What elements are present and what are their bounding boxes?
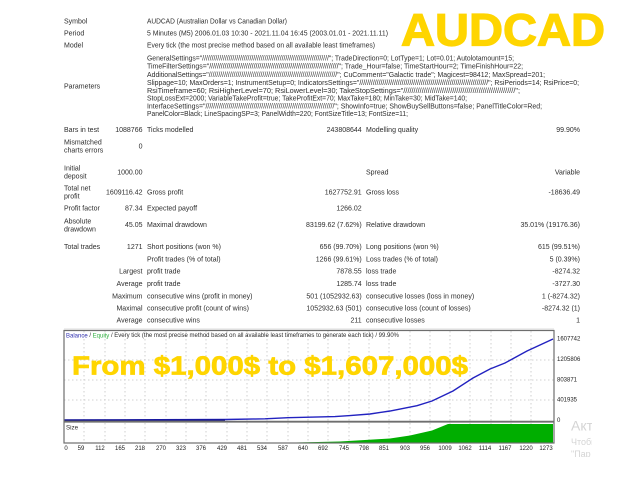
parameters block: PanelColor=Black; LineSpacingSP=3; PanelWidth=220; FontSizeTitle=13; FontSize=11; [147, 111, 408, 118]
profit summary rows: Total net [64, 186, 91, 192]
test quality rows: Mismatched [64, 140, 102, 146]
profit summary rows: -18636.49 [548, 190, 580, 196]
parameters block: TimeFilterSettings="///////////////////////////////////////////////////////////////////"; Trade_Hour=false; TimeStartHour=2; TimeFinishHour=22; [147, 64, 523, 70]
x axis labels: 59 [78, 446, 85, 452]
x axis labels: 745 [339, 446, 350, 452]
x axis labels: 112 [95, 446, 105, 452]
trade statistics rows: Short positions (won %) [147, 244, 221, 251]
trade statistics rows: -8274.32 [552, 268, 580, 276]
watermark text: "Пар [571, 449, 591, 459]
x axis labels: 376 [196, 446, 207, 452]
profit summary rows: Spread [366, 170, 389, 176]
trade statistics rows: 1266 (99.61%) [316, 256, 362, 264]
profit summary rows: drawdown [64, 226, 96, 234]
trade statistics rows: loss trade [366, 268, 396, 276]
x axis labels: 1273 [539, 446, 553, 452]
trade statistics rows: 5 (0.39%) [550, 256, 580, 264]
trade statistics rows: profit trade [147, 281, 181, 288]
parameters block: AdditionalSettings="///////////////////////////////////////////////////////////////////"; CuComment="Galactic trade"; Magicest=98412; MaxSpread=201; [147, 72, 545, 79]
trade statistics rows: Largest [119, 268, 143, 276]
trade statistics rows: consecutive profit (count of wins) [147, 306, 249, 312]
trade statistics rows: 1 [576, 318, 580, 324]
parameters block: GeneralSettings="///////////////////////////////////////////////////////////////////"; TradeDirection=0; LotType=1; Lot=0.01; Autolotamount=15; [147, 56, 514, 62]
balance line [64, 339, 553, 420]
x axis labels: 1220 [519, 446, 533, 452]
parameters block: RsiTimeframe=60; RsiHigherLevel=70; RsiLowerLevel=30; TakeStopSettings="///////////////////////////////////////////////////////"; [147, 88, 520, 95]
header rows: Symbol [64, 18, 88, 26]
x axis labels: 956 [420, 446, 431, 452]
profit summary rows: Gross profit [147, 190, 183, 196]
trade statistics rows: 1271 [127, 244, 143, 251]
parameters block: InterfaceSettings="///////////////////////////////////////////////////////////////////"; ShowInfo=true; ShowBuySellButtons=false; PanelTitleColor=Red; [147, 104, 542, 110]
size area [285, 424, 553, 443]
trade statistics rows: loss trade [366, 281, 396, 288]
x axis labels: 165 [115, 446, 126, 452]
x axis labels: 798 [359, 446, 370, 452]
profit summary rows [64, 166, 580, 234]
x axis labels: 1167 [499, 446, 512, 452]
chart legend text: Balance / Equity / Every tick (the most precise method based on all available least timeframes to generate each tick) / 99.90% [66, 332, 399, 339]
header rows [64, 18, 388, 50]
x axis labels: 429 [217, 446, 228, 452]
profit summary rows: 1000.00 [117, 170, 143, 176]
trade statistics rows: 211 [351, 318, 362, 324]
test quality rows: charts errors [64, 148, 104, 154]
trade statistics rows: profit trade [147, 268, 181, 276]
trade statistics rows: Profit trades (% of total) [147, 256, 221, 264]
profit summary rows: 83199.62 (7.62%) [306, 222, 362, 229]
x axis labels: 323 [176, 446, 187, 452]
profit summary rows: Absolute [64, 218, 91, 226]
profit summary rows: profit [64, 194, 80, 200]
trade statistics rows: -3727.30 [552, 281, 580, 288]
trade statistics rows: Loss trades (% of total) [366, 256, 438, 264]
trade statistics rows: -8274.32 (1) [542, 306, 580, 312]
y axis labels: 401935 [557, 398, 578, 404]
trade statistics rows: 7878.55 [336, 268, 362, 276]
profit summary rows: Gross loss [366, 190, 400, 196]
y axis labels: 0 [557, 418, 561, 424]
x axis labels: 0 [64, 446, 68, 452]
x axis labels: 692 [318, 446, 329, 452]
test quality rows: Ticks modelled [147, 127, 194, 134]
size panel label: Size [66, 424, 79, 432]
test quality rows: Modelling quality [366, 127, 419, 134]
x axis labels: 1009 [438, 446, 452, 452]
trade statistics rows: Average [117, 281, 143, 288]
x axis labels: 903 [400, 446, 411, 452]
trade statistics rows: 615 (99.51%) [538, 244, 580, 251]
trade statistics rows: consecutive loss (count of losses) [366, 306, 471, 312]
y axis labels [557, 336, 581, 424]
trade statistics rows: Total trades [64, 244, 101, 251]
x axis labels: 218 [135, 446, 146, 452]
parameters block: StopLossExt=2000; VariableTakeProfit=true; TakeProfitExt=70; MaxTake=180; MinTake=30; MidTake=140; [147, 96, 467, 102]
trade statistics rows: Long positions (won %) [366, 244, 439, 251]
title: AUDCAD [401, 4, 605, 56]
profit summary rows: 35.01% (19176.36) [520, 222, 580, 229]
watermark text [571, 418, 608, 459]
profit headline: From $1,000$ to $1,607,000$ [72, 350, 469, 380]
report table [64, 18, 580, 324]
profit summary rows: 1609116.42 [106, 190, 143, 196]
profit summary rows: Profit factor [64, 206, 100, 212]
x axis labels: 481 [237, 446, 248, 452]
test quality rows: Bars in test [64, 127, 99, 134]
backtest chart [64, 330, 581, 452]
trade statistics rows: Average [117, 318, 143, 324]
profit summary rows: Expected payoff [147, 206, 197, 212]
header rows: AUDCAD (Australian Dollar vs Canadian Dollar) [147, 18, 287, 26]
profit summary rows: Initial [64, 166, 81, 172]
x axis labels [64, 446, 553, 452]
header rows: Every tick (the most precise method based on all available least timeframes) [147, 42, 375, 50]
x axis labels: 270 [156, 446, 167, 452]
profit summary rows: 1266.02 [336, 206, 362, 212]
trade statistics rows: 656 (99.70%) [320, 244, 362, 251]
test quality rows: 243808644 [327, 127, 362, 134]
profit summary rows: 87.34 [125, 206, 143, 212]
watermark text: Чтобы [571, 437, 598, 447]
trade statistics rows: 501 (1052932.63) [306, 294, 362, 300]
test quality rows: 0 [139, 144, 143, 150]
trade statistics rows: consecutive wins [147, 318, 200, 324]
profit summary rows: Relative drawdown [366, 222, 425, 229]
trade statistics rows: consecutive wins (profit in money) [147, 294, 252, 300]
profit summary rows: Variable [555, 170, 580, 176]
trade statistics rows: consecutive losses (loss in money) [366, 294, 474, 300]
trade statistics rows: 1285.74 [336, 281, 362, 288]
trade statistics rows: consecutive losses [366, 318, 425, 324]
test quality rows: 99.90% [556, 127, 580, 134]
trade statistics rows [64, 244, 580, 324]
profit summary rows: 45.05 [125, 222, 143, 229]
chart frame [64, 330, 554, 443]
profit summary rows: Maximal drawdown [147, 222, 207, 229]
trade statistics rows: Maximum [112, 294, 143, 300]
parameters block: Parameters [64, 84, 101, 90]
profit summary rows: deposit [64, 174, 87, 180]
x axis labels: 1062 [458, 446, 472, 452]
x axis labels: 587 [278, 446, 289, 452]
x axis labels: 851 [379, 446, 390, 452]
x axis labels: 534 [257, 446, 268, 452]
parameters block [64, 56, 579, 118]
test quality rows: 1088766 [115, 127, 143, 134]
y axis labels: 803871 [557, 378, 578, 384]
header rows: 5 Minutes (M5) 2006.01.03 10:30 - 2021.11.04 16:45 (2003.01.01 - 2021.11.11) [147, 30, 388, 38]
watermark text: Актив [571, 418, 608, 434]
y axis labels: 1607742 [557, 336, 581, 342]
trade statistics rows: 1 (-8274.32) [542, 294, 580, 300]
x axis labels: 640 [298, 446, 309, 452]
parameters block: Slippage=10; MaxOrders=1; InstrumentSetup=0; IndicatorsSettings="///////////////////////////////////////////////////////////////////"; RsiPeriods=14; RsiPrice=0; [147, 80, 579, 87]
test quality rows [64, 127, 580, 154]
header rows: Period [64, 30, 84, 38]
header rows: Model [64, 42, 84, 50]
trade statistics rows: Maximal [116, 306, 143, 312]
trade statistics rows: 1052932.63 (501) [306, 306, 362, 312]
profit summary rows: 1627752.91 [325, 190, 362, 196]
x axis labels: 1114 [479, 446, 492, 452]
y axis labels: 1205806 [557, 357, 581, 363]
